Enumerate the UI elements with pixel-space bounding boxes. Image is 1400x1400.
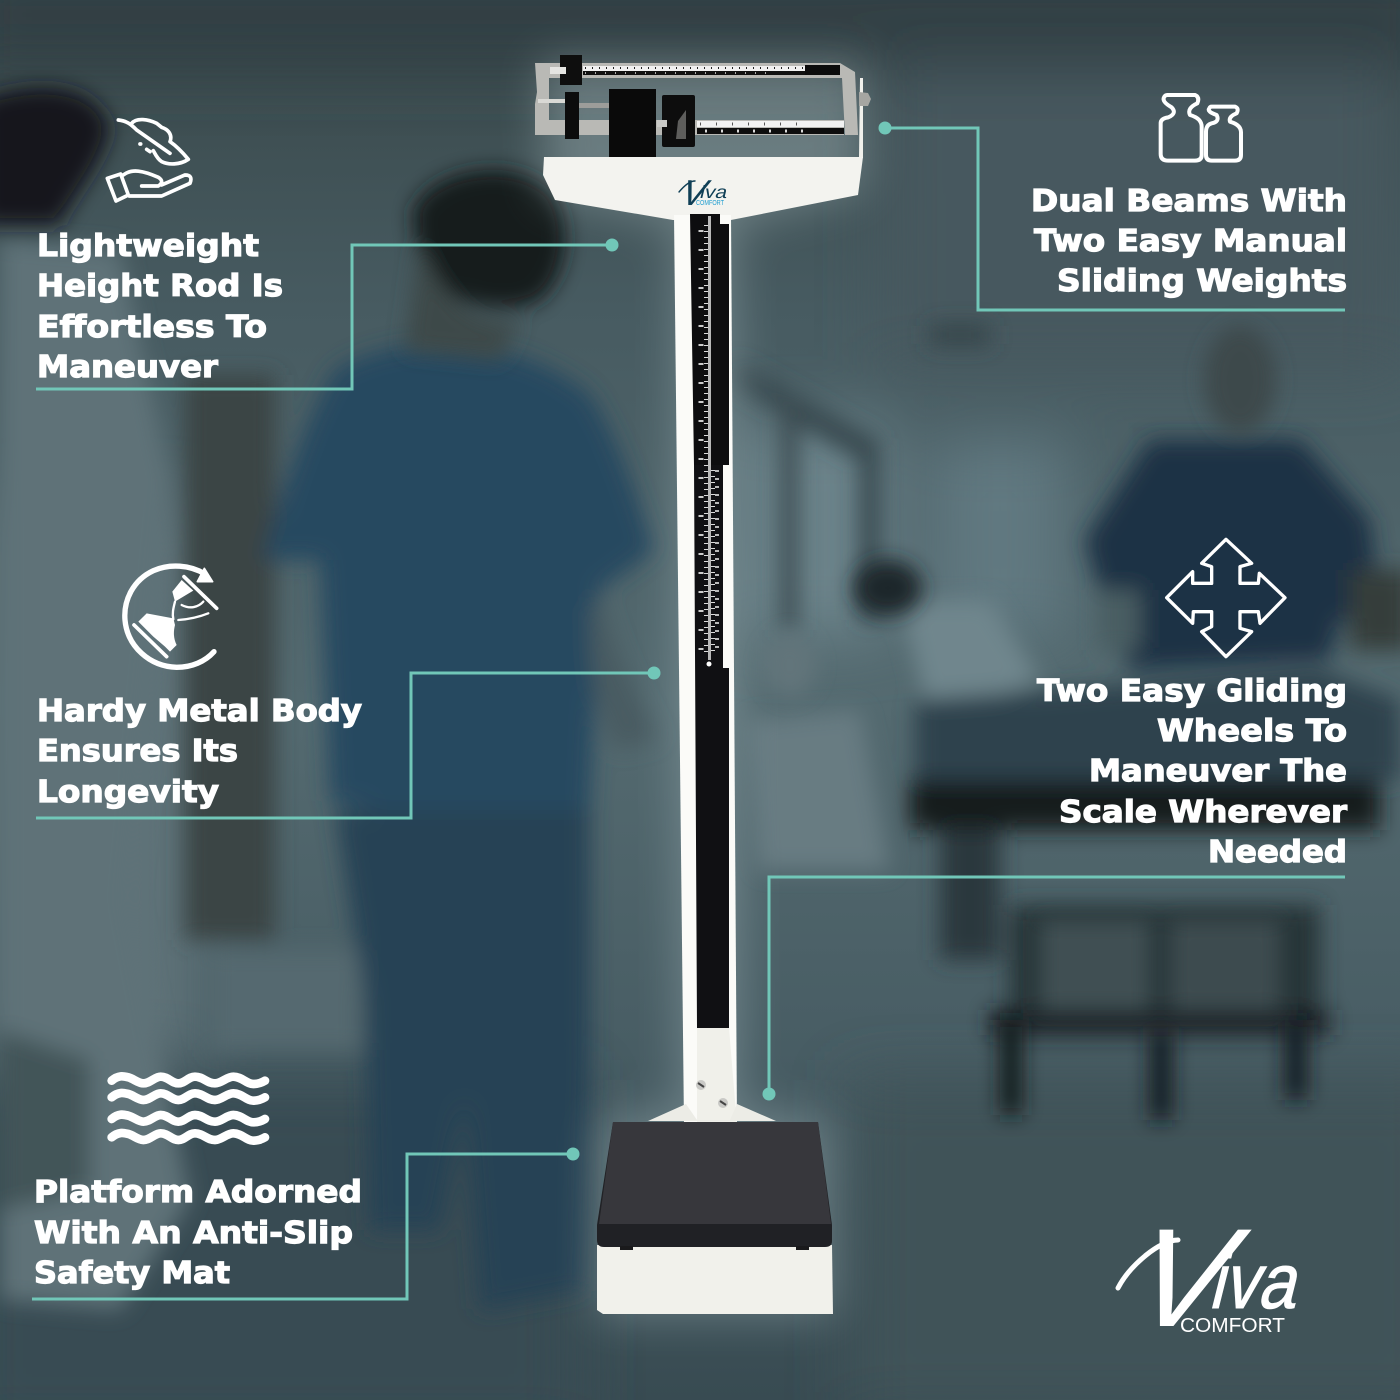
heading text [34,1175,362,1291]
column [674,215,737,1125]
scale glow [540,60,865,1315]
heading text: Sliding Weights [1057,264,1347,299]
leader line [762,877,1345,1100]
icon: waves [112,1076,265,1141]
nurse shirt [262,344,655,821]
corridor rail [735,360,880,620]
nurse arm [590,590,660,750]
icon: feather over hand [107,120,191,201]
logo: Viva Comfort: iva [1204,1237,1312,1325]
small figure coat [900,600,1040,720]
ceiling panel [930,325,990,345]
heading text: Effortless To [37,310,267,345]
callout: gliding wheels [762,539,1347,1100]
heading text: Dual Beams With [1031,184,1347,219]
logo on head plate: V [675,172,715,213]
heading text: Wheels To [1157,714,1347,749]
head plate [543,157,863,220]
patient head [764,633,816,697]
lower ruler [697,121,844,127]
bed mattress [915,670,1400,780]
upper sliding weight [560,55,582,85]
heading text: Platform Adorned [34,1175,362,1210]
heading text: Two Easy Manual [1034,224,1347,259]
left figure hair [0,88,110,225]
leader line [36,238,618,389]
logo: Viva Comfort: V [1108,1199,1265,1356]
logo: Viva Comfort: COMFORT [1180,1315,1285,1337]
height rod [690,214,729,1028]
nurse trousers [335,810,590,1310]
heading text: Ensures Its [37,734,238,769]
door panel left [185,375,275,940]
heading text: Maneuver The [1089,754,1347,789]
heading text: Needed [1208,835,1347,870]
product: beam scale [535,55,871,1314]
upper ruler [583,66,805,71]
logo on head plate: iva [698,181,731,202]
base box [597,1245,833,1314]
leader line [878,122,1345,310]
anti-slip mat [597,1122,832,1250]
balance beam frame [535,55,871,158]
heading text [1031,184,1347,299]
leader line [36,666,660,818]
nurse hair [412,170,566,308]
leader line [32,1148,580,1299]
heading text: Maneuver [37,350,218,385]
heading text: Scale Wherever [1059,795,1347,830]
heading text: Safety Mat [34,1256,230,1291]
large sliding weight [609,89,656,158]
heading text [37,229,283,385]
callout: lightweight height rod [36,120,618,389]
doctor scrubs [1085,440,1380,670]
heading text [1037,674,1347,870]
icon: two weights [1161,95,1241,161]
heading text [37,694,362,810]
right edge crate [1350,570,1400,650]
left figure coat [0,240,190,1310]
small figure head [854,560,922,616]
icon: four-way arrow [1167,539,1285,657]
bed frame [910,780,1380,830]
heading text: With An Anti-Slip [34,1216,353,1251]
patient [750,710,890,870]
doctor head [1204,326,1276,434]
callout: dual beams [878,95,1347,310]
foot bracket [648,1104,776,1121]
callout: anti-slip platform [32,1076,580,1299]
icon: hourglass in circular arrow [125,566,217,667]
callout: hardy metal body [36,566,660,818]
heading text: Lightweight [37,229,259,264]
heading text: Longevity [37,775,219,810]
heading text: Two Easy Gliding [1037,674,1347,709]
logo on head plate: COMFORT [696,200,725,207]
heading text: Hardy Metal Body [37,694,362,729]
bed lower [1010,905,1320,1010]
heading text: Height Rod Is [37,269,283,304]
mid poise [662,95,695,147]
screws [696,1080,728,1108]
small block [565,92,579,139]
